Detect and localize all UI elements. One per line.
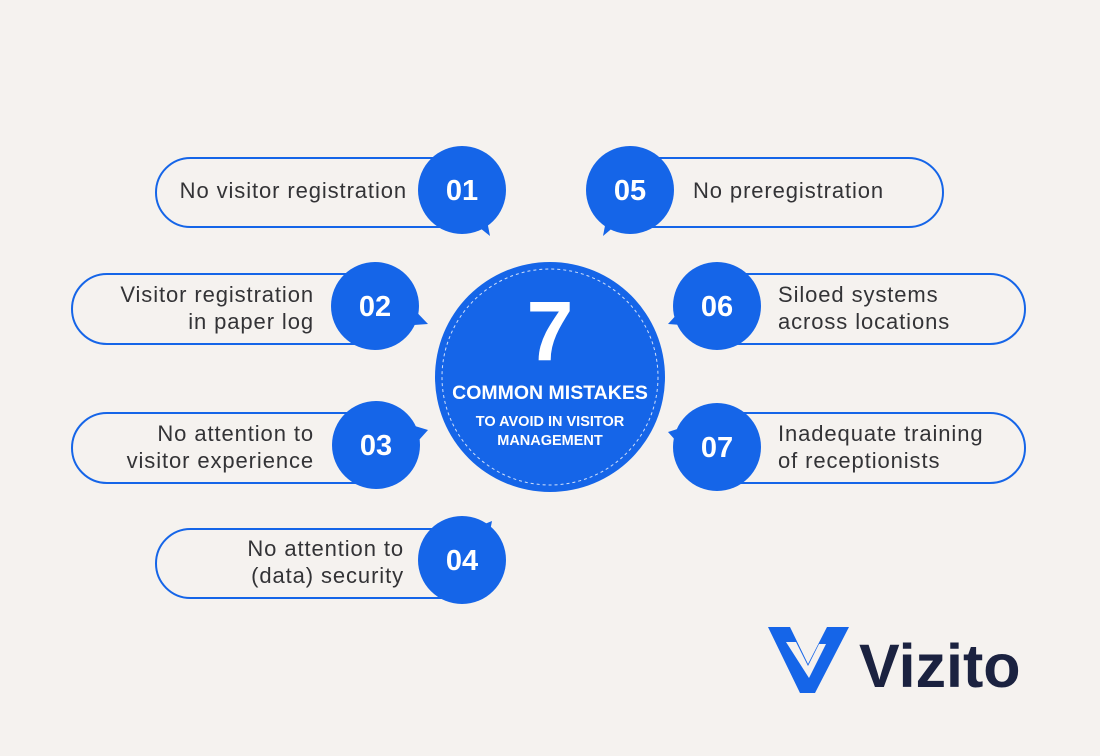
item 04: 04 <box>446 545 478 577</box>
item 05: No preregistration <box>693 178 884 203</box>
item 03: No attention to <box>157 421 314 446</box>
item 02 <box>72 262 428 350</box>
logo: Vizito <box>768 627 1021 700</box>
item 02: in paper log <box>188 309 314 334</box>
center circle title: COMMON MISTAKES <box>452 382 648 404</box>
logo: Vizito: Vizito <box>859 632 1021 700</box>
center circle title: TO AVOID IN VISITOR <box>476 414 625 430</box>
item 04 <box>156 516 506 604</box>
item 02: Visitor registration <box>120 282 314 307</box>
item 01 <box>156 146 506 236</box>
item 01: 01 <box>446 175 478 207</box>
center circle title <box>435 262 665 492</box>
item 07: 07 <box>701 432 733 464</box>
item 04: (data) security <box>251 563 404 588</box>
item 02: 02 <box>359 291 391 323</box>
item 06 <box>668 262 1025 350</box>
center circle title: MANAGEMENT <box>497 433 603 449</box>
item 07: of receptionists <box>778 448 940 473</box>
item 04: No attention to <box>247 536 404 561</box>
item 07: Inadequate training <box>778 421 983 446</box>
item 03: 03 <box>360 430 392 462</box>
item 06: Siloed systems <box>778 282 939 307</box>
item 03: visitor experience <box>127 448 314 473</box>
item 05: 05 <box>614 175 646 207</box>
item 06: 06 <box>701 291 733 323</box>
center circle title: 7 <box>527 284 573 378</box>
item 01: No visitor registration <box>180 178 407 203</box>
item 07 <box>668 403 1025 491</box>
item 06: across locations <box>778 309 950 334</box>
item 03 <box>72 401 428 489</box>
item 05 <box>586 146 943 236</box>
